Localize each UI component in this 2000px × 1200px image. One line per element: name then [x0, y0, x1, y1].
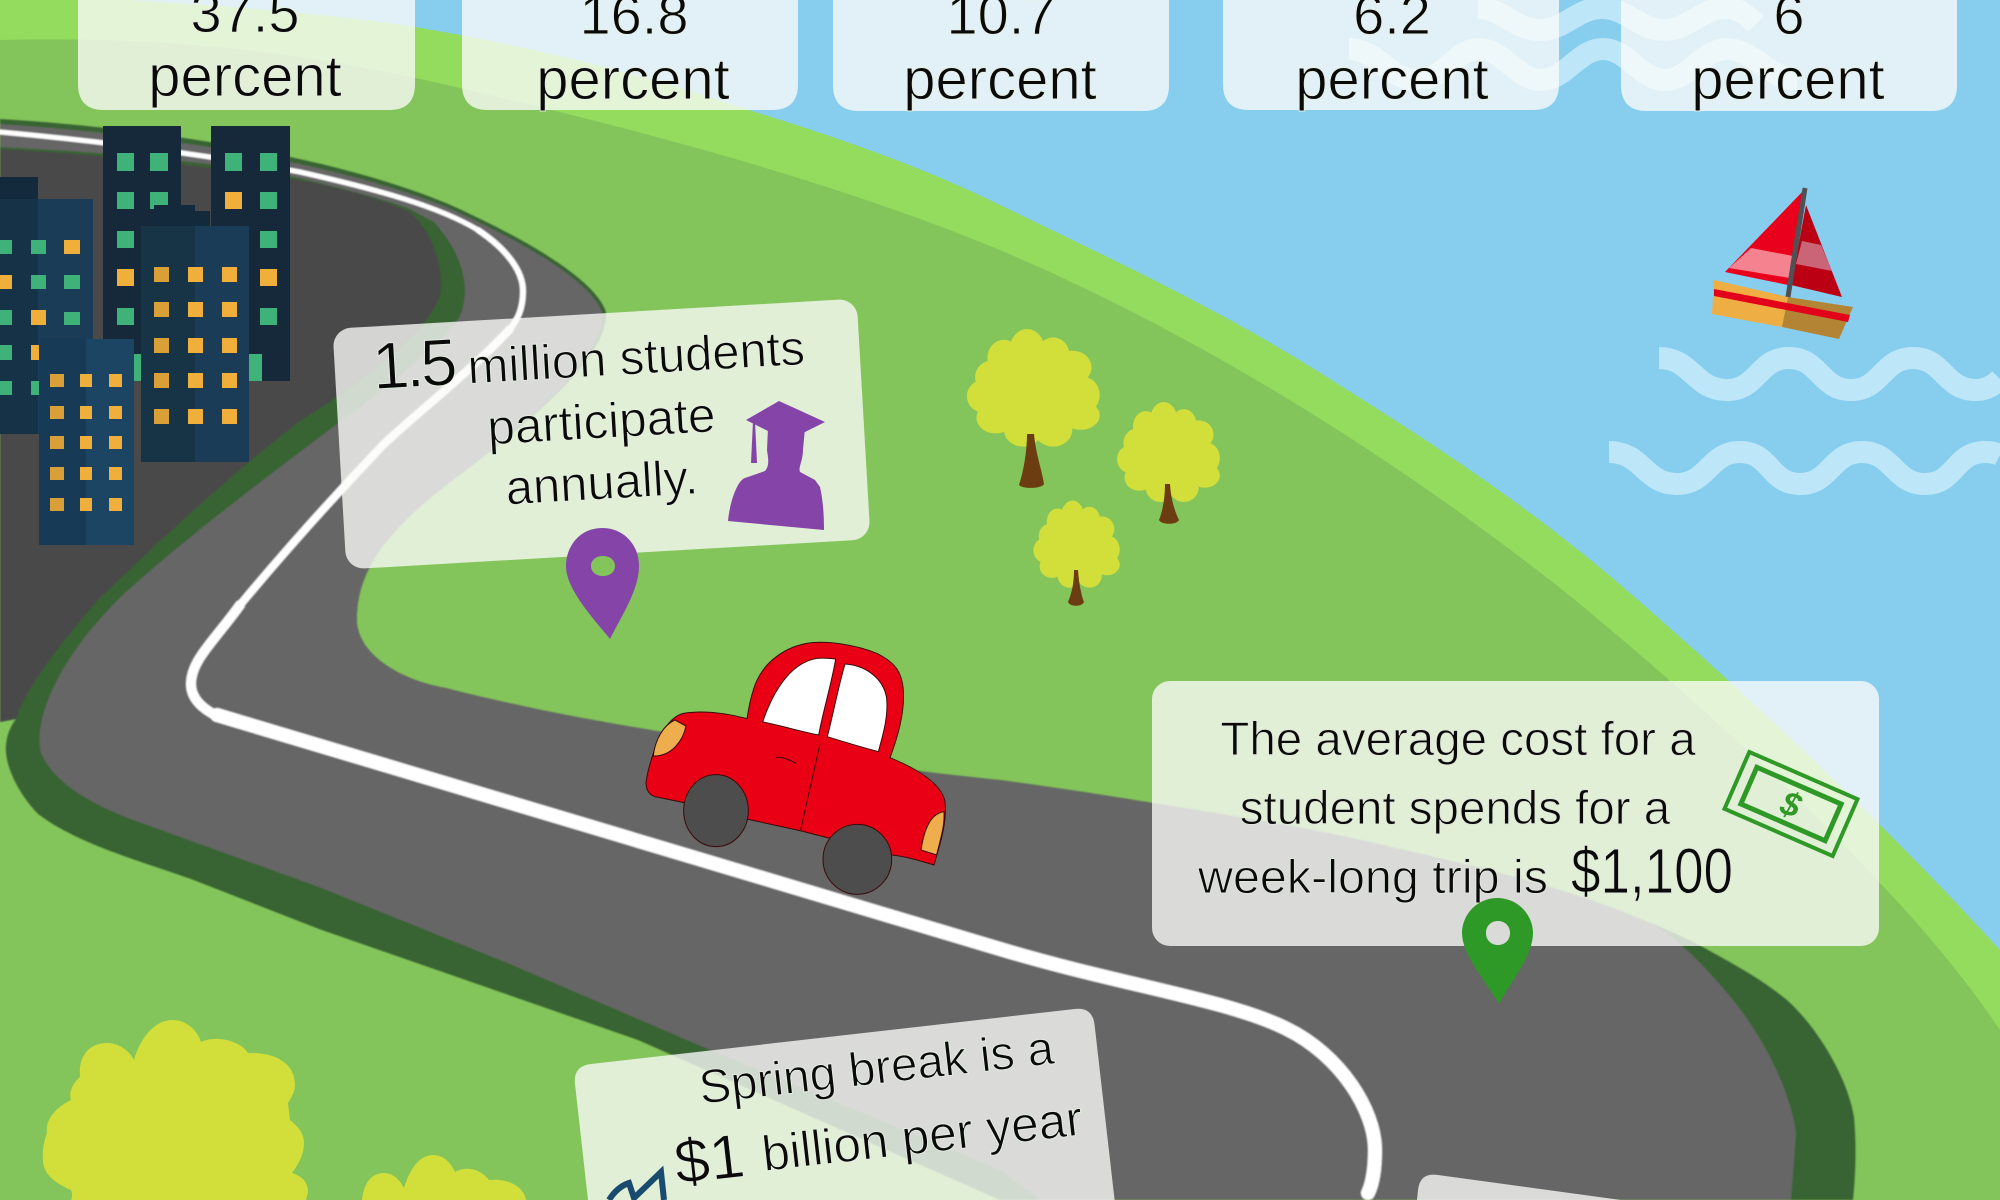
stat card 37.5 percent — [78, 0, 415, 110]
stat card 6 percent: percent — [1691, 47, 1885, 112]
callout: spring break revenue: $1 — [671, 1121, 748, 1198]
icon: purple location pin — [566, 528, 639, 639]
car door line — [776, 744, 820, 830]
callout: participants: participate — [486, 387, 717, 456]
city buildings — [0, 126, 290, 545]
stat card 6 percent — [1621, 0, 1957, 112]
tree 2 — [1117, 402, 1220, 524]
road white centre line — [0, 132, 1375, 1193]
boat left sail pale band — [1729, 248, 1793, 278]
front tower — [39, 339, 134, 545]
back tower left — [103, 126, 181, 381]
dark island inside the bend — [0, 149, 441, 722]
boat hull — [1712, 280, 1788, 327]
icon: graduate silhouette — [728, 401, 825, 530]
wave near the boat — [1659, 358, 2000, 390]
stat card 10.7 percent: percent — [903, 47, 1097, 112]
callout: participants: annually. — [504, 451, 699, 516]
callout: lower right partial card — [1417, 1175, 1621, 1200]
back tower right — [211, 126, 290, 381]
car front window — [827, 664, 887, 752]
boat mast — [1788, 188, 1805, 297]
left tower — [0, 177, 93, 434]
bush left — [43, 1020, 308, 1200]
car front light — [921, 812, 944, 855]
stat card 10.7 percent — [833, 0, 1169, 112]
callout: spring break revenue: Spring break is a — [696, 1022, 1057, 1115]
callout: average cost: The average cost for a — [1220, 713, 1696, 766]
boat right sail — [1791, 205, 1842, 297]
callout: participants: 1.5 million students — [370, 304, 806, 403]
red car — [646, 642, 945, 894]
boat right sail pale band — [1796, 241, 1832, 271]
lower wave — [1609, 452, 2000, 484]
boat hull shaded side — [1782, 297, 1853, 339]
callout: average cost: student spends for a — [1240, 782, 1671, 835]
stat card 37.5 percent: percent — [148, 44, 342, 109]
stat card 6.2 percent — [1223, 0, 1559, 112]
car front wheel — [823, 824, 892, 894]
stat card 6.2 percent: percent — [1295, 47, 1489, 112]
centre tower — [141, 205, 249, 462]
car rear window — [763, 658, 836, 735]
icon: dollar bill — [1725, 752, 1857, 856]
car rear light — [653, 720, 686, 756]
callout: participants — [332, 299, 871, 569]
stat card 16.8 percent: percent — [536, 47, 730, 112]
callout: average cost: week-long trip is — [1197, 851, 1548, 904]
callout: spring break revenue: billion per year — [759, 1091, 1085, 1182]
car rear wheel — [684, 775, 748, 847]
callout: average cost: $1,100 — [1571, 835, 1733, 907]
waves behind the top cards — [1349, 8, 1797, 80]
callout: spring break revenue — [575, 1009, 1115, 1200]
callout: average cost — [1152, 681, 1879, 946]
boat — [1712, 188, 1853, 339]
car body — [646, 642, 945, 865]
icon: dollar bill: $ — [1775, 784, 1807, 826]
icon: green location pin — [1462, 898, 1533, 1004]
tree 3 — [1033, 500, 1120, 606]
boat stripe — [1714, 289, 1850, 322]
icon: chart arrow in spring break callout — [609, 1172, 664, 1200]
tree 1 — [967, 329, 1100, 488]
bush right — [362, 1155, 526, 1200]
boat left sail — [1725, 189, 1805, 285]
stat card 16.8 percent — [462, 0, 798, 112]
